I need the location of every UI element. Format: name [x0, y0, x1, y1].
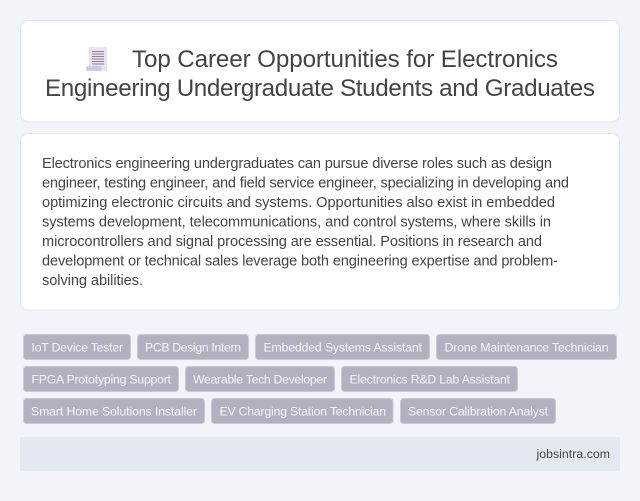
tag: IoT Device Tester: IoT Device Tester [32, 340, 123, 354]
tag: Sensor Calibration Analyst [400, 398, 556, 424]
text block: description: optimizing electronic circuits and systems. Opportunities also exist in embedded [42, 195, 555, 211]
footer text: source: jobsintra.com [536, 447, 610, 461]
tag list [24, 334, 616, 424]
text block: description: solving abilities. [42, 273, 143, 289]
text block: description: microcontrollers and signal processing are essential. Positions in research and [42, 234, 542, 250]
tag: Drone Maintenance Technician: Drone Maintenance Technician [444, 340, 608, 354]
text block: description: engineer, testing engineer, and field service engineer, specializing in developing and [42, 176, 569, 192]
tag: Electronics R&D Lab Assistant [342, 366, 518, 392]
tag: FPGA Prototyping Support: FPGA Prototyping Support [32, 372, 172, 386]
text block: description [42, 156, 569, 289]
footer [20, 437, 620, 471]
text block: description: development or technical sales leverage both engineering expertise and problem- [42, 254, 558, 270]
heading: title [45, 46, 595, 102]
tag: IoT Device Tester [24, 334, 130, 360]
text block: description: Electronics engineering undergraduates can pursue diverse roles such as design [42, 156, 552, 172]
tag: Smart Home Solutions Installer: Smart Home Solutions Installer [31, 404, 197, 418]
icon: document scroll [86, 47, 107, 71]
tag: PCB Design Intern [138, 334, 248, 360]
tag: Sensor Calibration Analyst: Sensor Calibration Analyst [408, 404, 549, 418]
tag: Smart Home Solutions Installer [24, 398, 204, 424]
panel: title card [20, 20, 620, 122]
heading: title: Engineering Undergraduate Students and Graduates [45, 75, 595, 102]
tag: Embedded Systems Assistant: Embedded Systems Assistant [264, 340, 423, 354]
panel: description [20, 134, 620, 310]
tag: Wearable Tech Developer: Wearable Tech Developer [193, 372, 327, 386]
tag: Wearable Tech Developer [186, 366, 334, 392]
tag: EV Charging Station Technician [212, 398, 393, 424]
tag: PCB Design Intern: PCB Design Intern [145, 340, 241, 354]
heading: title: Top Career Opportunities for Electronics [132, 46, 558, 73]
tag: FPGA Prototyping Support [24, 366, 178, 392]
tag: Electronics R&D Lab Assistant: Electronics R&D Lab Assistant [350, 372, 511, 386]
tag: Embedded Systems Assistant [256, 334, 430, 360]
tag: Drone Maintenance Technician [436, 334, 616, 360]
tag: EV Charging Station Technician: EV Charging Station Technician [220, 404, 386, 418]
text block: description: systems development, telecommunications, and control systems, where skills in [42, 214, 551, 230]
